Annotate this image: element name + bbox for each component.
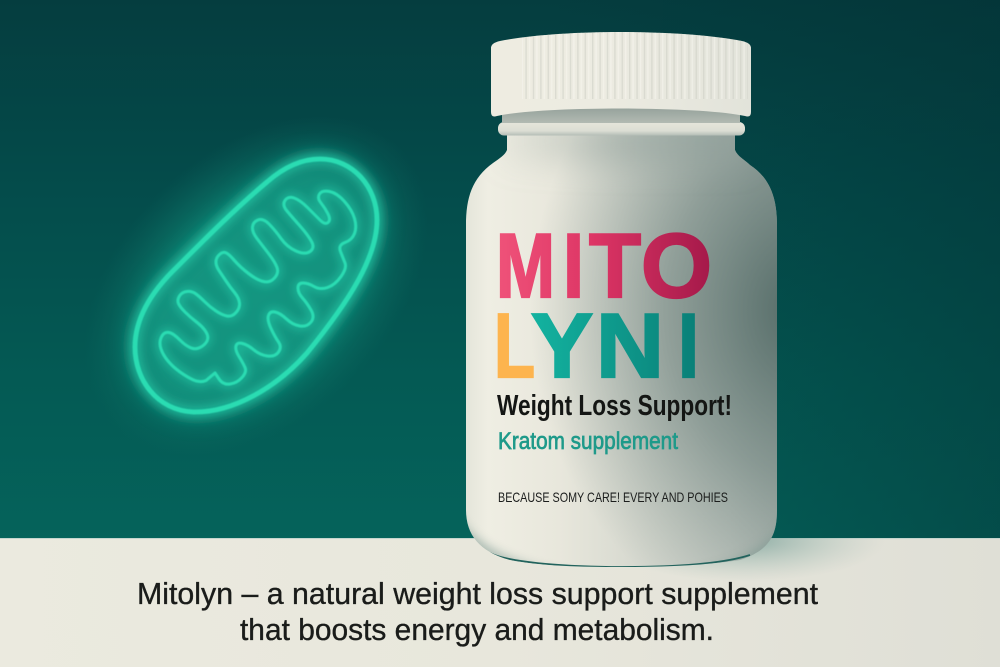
brand name: MITO: M <box>496 216 555 317</box>
brand name: LYNI: N <box>596 296 664 397</box>
ribbed cap <box>491 30 751 116</box>
label small print: BECAUSE SOMY CARE! EVERY AND POHIES <box>498 489 728 505</box>
supplement bottle <box>466 32 777 567</box>
label subtitle: Kratom supplement <box>498 428 678 455</box>
under-cap shadow <box>502 104 740 123</box>
caption <box>137 576 818 647</box>
table surface <box>0 498 1000 667</box>
neck ring <box>498 122 745 136</box>
brand name: MITO <box>496 216 712 317</box>
brand name: MITO: T <box>589 216 641 317</box>
caption: that boosts energy and metabolism. <box>240 612 714 647</box>
caption: Mitolyn – a natural weight loss support supplement <box>137 576 818 611</box>
glowing mitochondrion icon <box>18 50 494 522</box>
brand name: MITO: O <box>641 216 712 317</box>
brand name: LYNI <box>494 296 699 397</box>
brand name: MITO: I <box>563 216 584 317</box>
label headline: Weight Loss Support! <box>497 390 732 422</box>
brand name: LYNI: I <box>678 296 699 397</box>
brand name: LYNI: Y <box>531 296 593 397</box>
brand name: LYNI: L <box>494 296 535 397</box>
bottle body <box>466 136 777 567</box>
